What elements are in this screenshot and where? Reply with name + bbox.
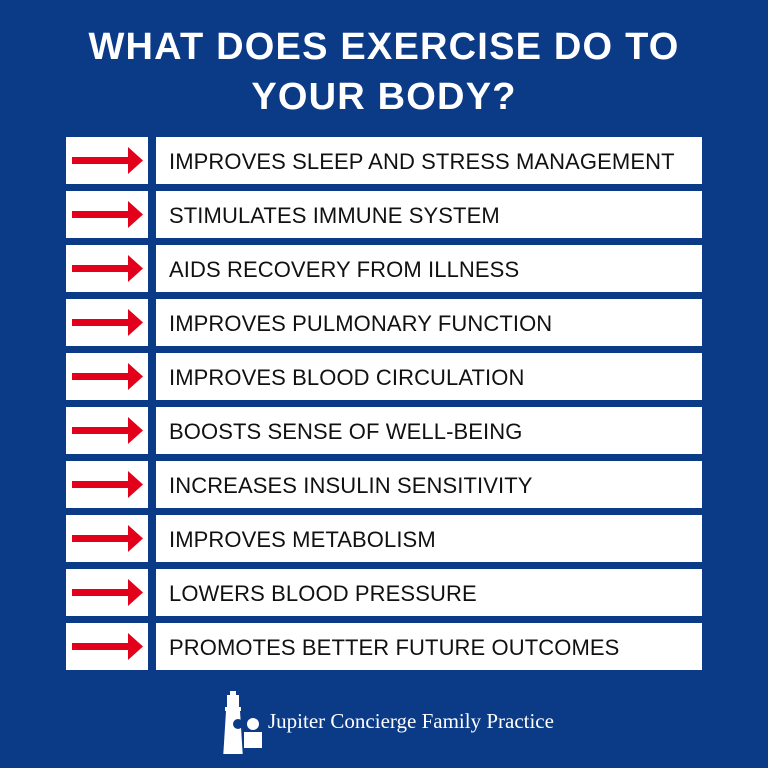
- item 4: [66, 299, 702, 346]
- item 3: AIDS RECOVERY FROM ILLNESS: [169, 257, 519, 282]
- title: YOUR BODY?: [251, 76, 517, 118]
- item 8: [66, 515, 702, 562]
- icon: lighthouse: [223, 691, 262, 759]
- item 2: [66, 191, 702, 238]
- item 10: PROMOTES BETTER FUTURE OUTCOMES: [169, 635, 619, 660]
- item 5: IMPROVES BLOOD CIRCULATION: [169, 365, 524, 390]
- brand name: Jupiter Concierge Family Practice: [268, 709, 554, 733]
- item 6: BOOSTS SENSE OF WELL-BEING: [169, 419, 522, 444]
- item 7: INCREASES INSULIN SENSITIVITY: [169, 473, 533, 498]
- title: [88, 26, 680, 118]
- item 1: [66, 137, 702, 184]
- title: WHAT DOES EXERCISE DO TO: [88, 26, 680, 68]
- item 1: IMPROVES SLEEP AND STRESS MANAGEMENT: [169, 149, 675, 174]
- logo: [223, 691, 554, 754]
- item 5: [66, 353, 702, 400]
- item 7: [66, 461, 702, 508]
- item 2: STIMULATES IMMUNE SYSTEM: [169, 203, 500, 228]
- item 6: [66, 407, 702, 454]
- item 4: IMPROVES PULMONARY FUNCTION: [169, 311, 552, 336]
- item 9: [66, 569, 702, 616]
- item 8: IMPROVES METABOLISM: [169, 527, 436, 552]
- item 3: [66, 245, 702, 292]
- item 10: [66, 623, 702, 670]
- item 9: LOWERS BLOOD PRESSURE: [169, 581, 477, 606]
